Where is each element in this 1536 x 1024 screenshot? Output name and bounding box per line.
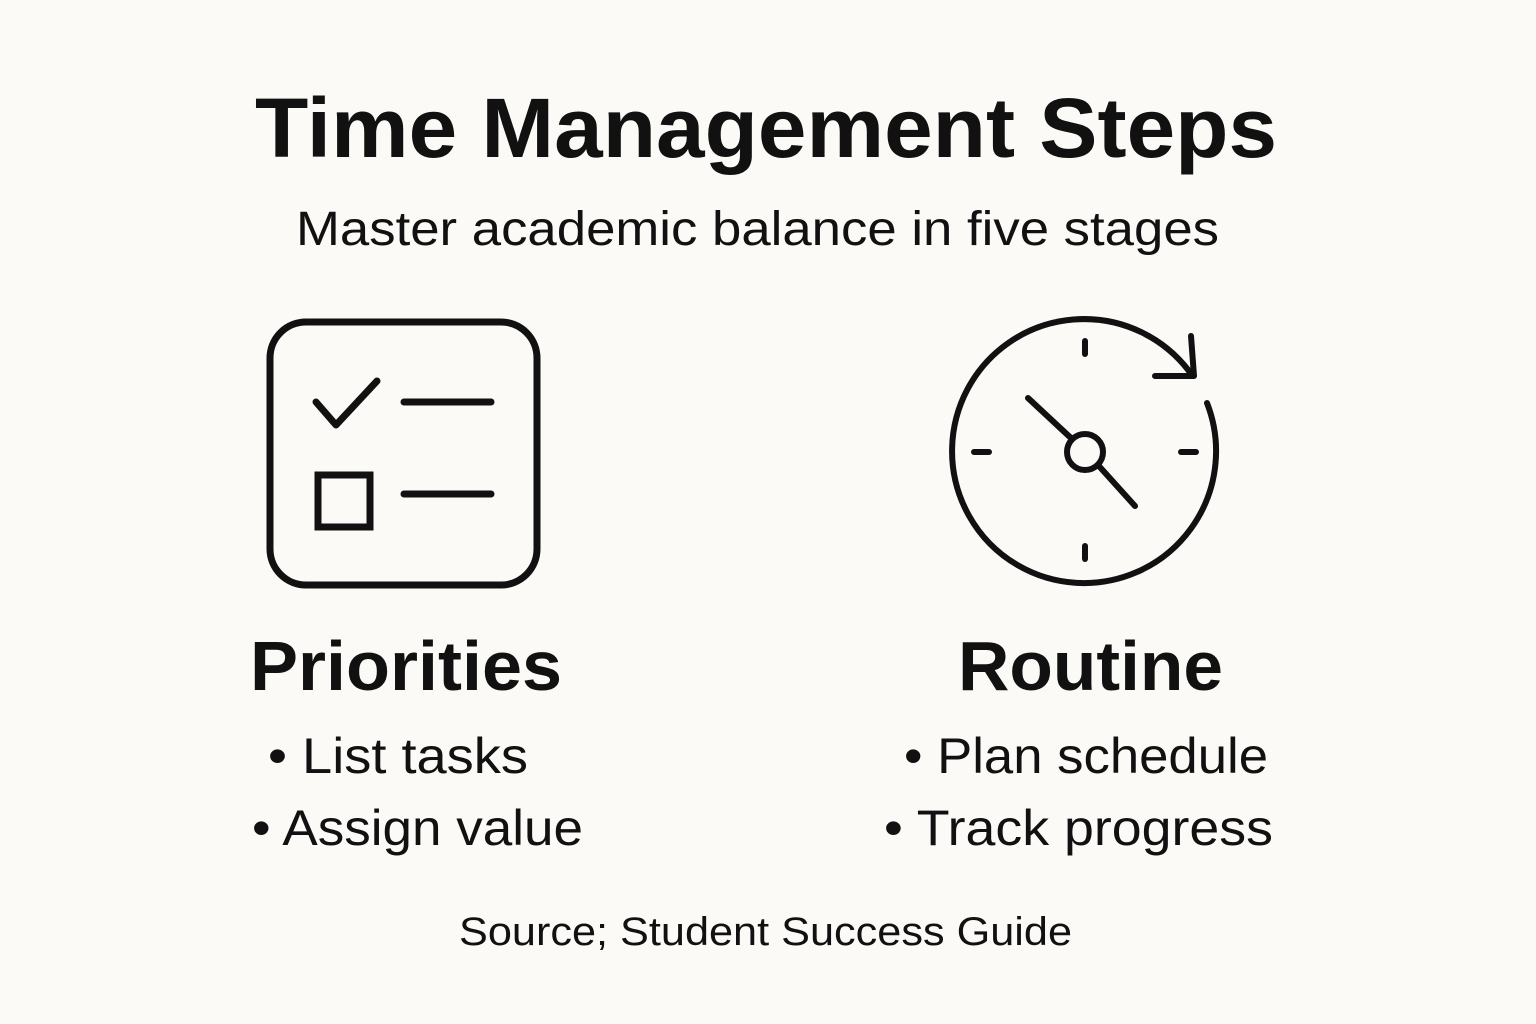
- bullet list: routine: • Track progress: [884, 800, 1273, 856]
- bullet list: priorities: • Assign value: [252, 800, 583, 856]
- bullet list: routine: [884, 728, 1273, 856]
- title: Time Management Steps: [255, 81, 1277, 175]
- panel: routine: [884, 319, 1273, 856]
- heading: routine: Routine: [958, 627, 1223, 705]
- bullet list: priorities: • List tasks: [268, 728, 528, 784]
- subtitle: Master academic balance in five stages: [296, 203, 1219, 256]
- source note: Source; Student Success Guide: [459, 910, 1072, 954]
- heading: priorities: Priorities: [250, 627, 562, 705]
- bullet list: priorities: [252, 728, 583, 856]
- panel: priorities: [250, 322, 583, 856]
- icon: checklist: [270, 322, 537, 585]
- icon: clock with arrow: [952, 319, 1216, 583]
- bullet list: routine: • Plan schedule: [904, 728, 1268, 784]
